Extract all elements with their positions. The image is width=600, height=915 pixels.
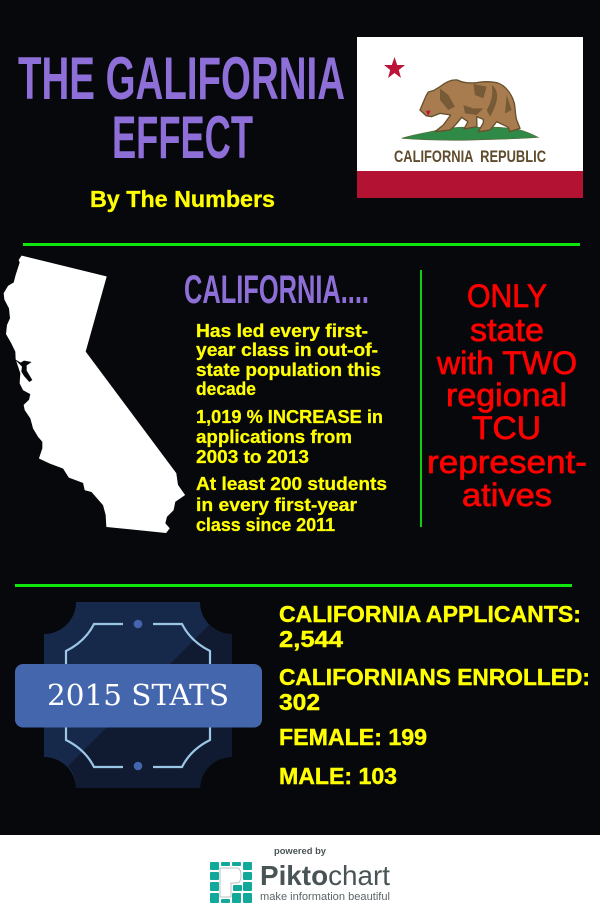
flag text: CALIFORNIA REPUBLIC bbox=[394, 148, 546, 166]
callout: only state with two representatives: with TWO bbox=[436, 345, 577, 381]
text block: 2015 statistics: 2,544 bbox=[279, 626, 343, 652]
badge: 2015 stats bbox=[15, 602, 262, 788]
icon: grass bbox=[402, 127, 538, 140]
text block: California facts: in every first-year bbox=[196, 495, 357, 515]
san francisco bay bbox=[14, 359, 32, 382]
text block: California facts: state population this bbox=[196, 360, 381, 380]
badge inner frame bbox=[66, 624, 210, 767]
footer tagline: make information beautiful bbox=[260, 891, 390, 903]
footer wordmark: Piktochart bbox=[260, 860, 390, 891]
text block: California facts: year class in out-of- bbox=[196, 340, 378, 360]
text block: California facts bbox=[196, 321, 387, 535]
text block: 2015 statistics: CALIFORNIANS ENROLLED: bbox=[279, 664, 590, 690]
text block: 2015 statistics: MALE: 103 bbox=[279, 763, 397, 789]
icon: California flag bbox=[357, 37, 583, 198]
heading: California: CALIFORNIA.... bbox=[184, 268, 369, 312]
badge banner bbox=[15, 664, 262, 728]
callout: only state with two representatives bbox=[427, 278, 587, 513]
title: THE GALIFORNIA bbox=[18, 45, 345, 112]
bear shading bbox=[440, 84, 512, 117]
text block: 2015 statistics: 302 bbox=[279, 689, 320, 715]
footer bbox=[0, 835, 600, 915]
callout: only state with two representatives: represent- bbox=[427, 444, 587, 480]
text block: California facts: Has led every first- bbox=[196, 321, 368, 341]
callout: only state with two representatives: TCU bbox=[472, 410, 541, 446]
badge label: 2015 STATS bbox=[47, 678, 229, 712]
badge body bbox=[44, 602, 232, 788]
text block: 2015 statistics bbox=[279, 601, 590, 789]
icon: Piktochart logo bbox=[210, 862, 252, 903]
title bbox=[18, 45, 345, 171]
callout: only state with two representatives: regional bbox=[446, 377, 567, 413]
text block: 2015 statistics: CALIFORNIA APPLICANTS: bbox=[279, 601, 581, 627]
text block: California facts: decade bbox=[196, 379, 256, 399]
title: EFFECT bbox=[112, 104, 253, 171]
callout: only state with two representatives: ONLY bbox=[467, 278, 547, 314]
icon: flag star bbox=[384, 57, 405, 78]
callout: only state with two representatives: state bbox=[470, 312, 544, 348]
icon: bear bbox=[420, 80, 520, 132]
icon: California state map bbox=[4, 256, 185, 533]
text block: California facts: applications from bbox=[196, 427, 352, 447]
text block: 2015 statistics: FEMALE: 199 bbox=[279, 724, 427, 750]
text block: California facts: 1,019 % INCREASE in bbox=[196, 407, 383, 427]
text block: California facts: At least 200 students bbox=[196, 474, 387, 494]
subtitle: By The Numbers bbox=[90, 186, 275, 212]
callout: only state with two representatives: atives bbox=[462, 477, 552, 513]
text block: California facts: class since 2011 bbox=[196, 515, 335, 535]
text block: California facts: 2003 to 2013 bbox=[196, 447, 309, 467]
footer powered by: powered by bbox=[274, 846, 327, 857]
